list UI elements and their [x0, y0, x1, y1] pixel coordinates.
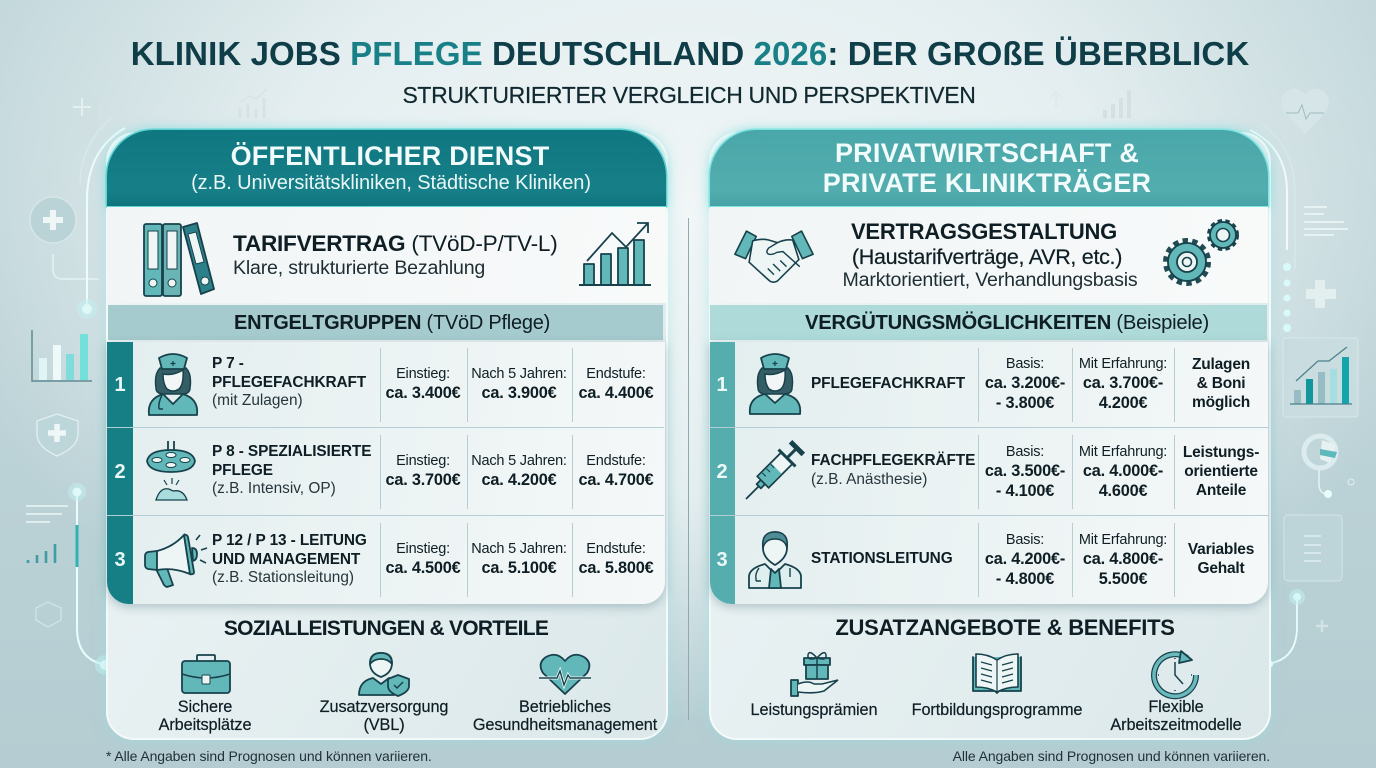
values: P7 Endstufe [579, 366, 654, 402]
values: Basis 2: - 4.100€ [996, 482, 1054, 500]
values: P12 Endstufe: ca. 5.800€ [579, 559, 653, 577]
values: Erfahrung 1: Mit Erfahrung: [1079, 356, 1167, 372]
header: öffentlicher Dienst [107, 130, 666, 206]
values: Erfahrung 3: 5.500€ [1099, 570, 1147, 588]
icon: gift hand [790, 649, 840, 697]
values: Erfahrung 3 [1079, 531, 1167, 590]
band: Vergütungsmöglichkeiten: VERGÜTUNGSMÖGLICHKEITEN (Beispiele) [805, 312, 1209, 334]
label: Fortbildungsprogramme: Fortbildungsprogramme [912, 701, 1082, 719]
values: P8 Einstieg: ca. 3.700€ [386, 471, 460, 489]
values: Basis 3: Basis: [1006, 532, 1044, 548]
contract block [107, 207, 666, 303]
icon: chart growth [579, 222, 651, 286]
values: P7 Einstieg [386, 366, 460, 402]
values: Zulagen: & Boni [1197, 375, 1245, 392]
values: P7 5 Jahre [471, 366, 567, 402]
divider between columns [688, 218, 689, 720]
values: Zulagen [1192, 356, 1250, 411]
label: Betriebliches Gesundheitsmanagement: Gesundheitsmanagement [473, 716, 657, 734]
subtitle: STRUKTURIERTER VERGLEICH UND PERSPEKTIVEN [402, 82, 976, 108]
values: P12 Einstieg: ca. 4.500€ [386, 559, 460, 577]
icon: gears [1163, 219, 1239, 286]
values: P8 Einstieg: Einstieg: [396, 453, 450, 469]
values: P7 5 Jahre: ca. 3.900€ [482, 384, 556, 402]
text: P12/13: UND MANAGEMENT [212, 550, 360, 568]
values: Basis 1: ca. 3.200€- [985, 374, 1065, 392]
label: Leistungsprämien: Leistungsprämien [751, 701, 877, 719]
panel background right [709, 132, 1271, 740]
values: Erfahrung 1: 4.200€ [1099, 394, 1147, 412]
values: Basis 1: Basis: [1006, 356, 1044, 372]
panel background left [106, 132, 668, 740]
values: Basis 3: - 4.800€ [996, 570, 1054, 588]
background decoration: left column [26, 98, 126, 675]
values: P8 5 Jahre [471, 453, 567, 489]
values: P8 5 Jahre: ca. 4.200€ [482, 471, 556, 489]
values: Zulagen: Zulagen [1192, 356, 1250, 373]
row number 2 right: 2 [716, 461, 728, 483]
values: Erfahrung 1 [1079, 356, 1167, 412]
icon: doctor [748, 531, 802, 589]
row number 3: 3 [114, 549, 126, 571]
values: Leistungsorientierte: Anteile [1196, 482, 1246, 499]
icon: clock [1151, 649, 1199, 697]
values: Variables Gehalt: Gehalt [1197, 560, 1245, 577]
icon: briefcase [181, 654, 231, 694]
text: P12/13: (z.B. Stationsleitung) [212, 569, 354, 586]
label: Zusatzversorgung: (VBL) [363, 716, 405, 734]
values: Leistungsorientierte: Leistungs- [1183, 444, 1259, 461]
values: P12 Endstufe: Endstufe: [586, 541, 646, 557]
panel: öffentlicher Dienst [98, 122, 676, 741]
heading: Sozialleistungen: SOZIALLEISTUNGEN & VORTEILE [224, 617, 548, 640]
label: Betriebliches Gesundheitsmanagement: Betriebliches [519, 698, 611, 716]
text: P8: PFLEGE [212, 462, 273, 478]
values: Variables Gehalt: Variables [1188, 541, 1254, 558]
label: Flexible Arbeitszeitmodelle: Arbeitszeitmodelle [1110, 716, 1242, 734]
values: P8 Endstufe: Endstufe: [586, 453, 646, 469]
label: Zusatzversorgung: Zusatzversorgung [320, 698, 448, 716]
header: Privatwirtschaft: PRIVATE KLINIKTRÄGER [823, 168, 1151, 198]
header: Privatwirtschaft [710, 130, 1268, 206]
values: P12 Einstieg: Einstieg: [396, 541, 450, 557]
text: P8: (z.B. Intensiv, OP) [212, 480, 336, 497]
text: Stationsleitung: STATIONSLEITUNG [811, 550, 953, 567]
band: Vergütungsmöglichkeiten [710, 305, 1267, 340]
label: Sichere Arbeitsplätze: Arbeitsplätze [159, 716, 251, 734]
values: Variables Gehalt [1188, 540, 1254, 578]
text: P7 [212, 355, 366, 409]
text: P12/13 [212, 532, 367, 586]
heading: Vertragsgestaltung: VERTRAGSGESTALTUNG [851, 219, 1117, 244]
row number 1 right: 1 [716, 374, 728, 396]
values: Basis 2: Basis: [1006, 444, 1044, 460]
icon: person shield [358, 652, 410, 697]
values: P12 Endstufe [579, 541, 654, 577]
values: P12 5 Jahre [471, 541, 567, 577]
values: P7 Einstieg: ca. 3.400€ [386, 384, 460, 402]
values: Basis 2: ca. 3.500€- [985, 462, 1065, 480]
values: Erfahrung 3: Mit Erfahrung: [1079, 532, 1167, 548]
values: Basis 2 [985, 444, 1065, 500]
label: Zusatzversorgung [320, 698, 448, 734]
decoration: faint top icons [238, 89, 1131, 118]
icon: binders [143, 222, 215, 297]
values: P8 Einstieg [386, 453, 460, 489]
values: Erfahrung 1: ca. 3.700€- [1083, 374, 1163, 392]
values: Basis 1 [985, 356, 1065, 412]
text: P8: P 8 - SPEZIALISIERTE [212, 443, 371, 460]
text: Marktorientiert: Marktorientiert, Verhandlungsbasis [843, 269, 1137, 291]
values: Erfahrung 2: ca. 4.000€- [1083, 462, 1163, 480]
values: P7 Einstieg: Einstieg: [396, 366, 450, 382]
text: Fachpflegekräfte: (z.B. Anästhesie) [811, 470, 927, 488]
icon: nurse [148, 353, 198, 416]
values: Erfahrung 3: ca. 4.800€- [1083, 550, 1163, 568]
text: Klare Bezahlung: Klare, strukturierte Bezahlung [233, 257, 485, 279]
label: Betriebliches Gesundheitsmanagement [473, 698, 658, 734]
text: Fachpflegekräfte [811, 452, 975, 488]
text: Pflegefachkraft: PFLEGEFACHKRAFT [811, 375, 965, 392]
label: Flexible Arbeitszeitmodelle: Flexible [1148, 698, 1204, 716]
values: P7 5 Jahre: Nach 5 Jahren: [471, 366, 567, 382]
row number 2: 2 [114, 461, 126, 483]
icon: OP lamp [146, 441, 196, 501]
icon: heart pulse [539, 654, 591, 695]
number column [107, 342, 133, 604]
band: Entgeltgruppen: ENTGELTGRUPPEN (TVöD Pflege) [234, 312, 550, 334]
values: Erfahrung 2: 4.600€ [1099, 482, 1147, 500]
label: Sichere Arbeitsplätze [158, 698, 251, 734]
footnote right: Alle Angaben sind Prognosen und können variieren. [953, 748, 1270, 764]
values: P12 Einstieg [386, 541, 460, 577]
values: Erfahrung 2 [1079, 444, 1167, 500]
values: Basis 3 [985, 531, 1065, 590]
values: P7 Endstufe: ca. 4.400€ [579, 384, 653, 402]
background decoration: right column [1250, 89, 1358, 668]
footnote left: * Alle Angaben sind Prognosen und können variieren. [106, 748, 432, 764]
text: Haustarifverträge: (Haustarifverträge, AVR, etc.) [852, 245, 1122, 269]
heading: Tarifvertrag: TARIFVERTRAG (TVöD-P/TV-L) [233, 231, 557, 256]
icon: handshake [734, 230, 814, 283]
row number 1: 1 [114, 374, 126, 396]
values: Leistungsorientierte: orientierte [1184, 463, 1258, 480]
text: Fachpflegekräfte: FACHPFLEGEKRÄFTE [811, 452, 975, 469]
text: P12/13: P 12 / P 13 - LEITUNG [212, 532, 367, 549]
table: Vergütung [710, 342, 1268, 604]
text: P7: PFLEGEFACHKRAFT [212, 374, 366, 390]
values: Basis 1: - 3.800€ [996, 394, 1054, 412]
number column right [710, 342, 735, 604]
label: Flexible Arbeitszeitmodelle [1110, 698, 1242, 734]
values: P7 Endstufe: Endstufe: [586, 366, 646, 382]
values: P12 5 Jahre: Nach 5 Jahren: [471, 541, 567, 557]
values: P8 Endstufe: ca. 4.700€ [579, 471, 653, 489]
values: Zulagen: möglich [1192, 394, 1250, 411]
contract block right [710, 207, 1268, 303]
header: öffentlicher Dienst: ÖFFENTLICHER DIENST [231, 141, 549, 171]
label: Sichere Arbeitsplätze: Sichere [178, 698, 232, 716]
icon: nurse right [748, 353, 802, 415]
values: P12 5 Jahre: ca. 5.100€ [482, 559, 556, 577]
values: Erfahrung 2: Mit Erfahrung: [1079, 444, 1167, 460]
text: P7: P 7 - [212, 355, 244, 372]
text: P7: (mit Zulagen) [212, 392, 303, 409]
header: öffentlicher Dienst: (z.B. Universitätskliniken, Städtische Kliniken) [191, 172, 591, 194]
row number 3 right: 3 [716, 549, 728, 571]
values: Leistungsorientierte [1183, 444, 1259, 499]
icon: book [972, 653, 1022, 694]
header: Privatwirtschaft: PRIVATWIRTSCHAFT & [835, 138, 1139, 168]
icon: megaphone [144, 533, 208, 588]
icon: syringe [745, 440, 805, 500]
text: P8 [212, 443, 371, 497]
values: P8 5 Jahre: Nach 5 Jahren: [471, 453, 567, 469]
values: Basis 3: ca. 4.200€- [985, 550, 1065, 568]
table: Entgeltgruppen [107, 342, 665, 604]
heading: Zusatzangebote: ZUSATZANGEBOTE & BENEFITS [835, 615, 1175, 640]
band: Entgeltgruppen [108, 305, 663, 340]
title: KLINIK JOBS PFLEGE DEUTSCHLAND 2026: DER GROßE ÜBERBLICK [131, 35, 1249, 72]
values: P8 Endstufe [579, 453, 654, 489]
